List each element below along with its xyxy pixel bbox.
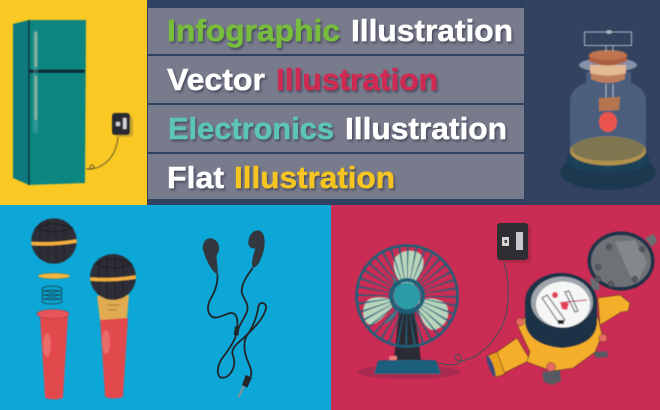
row: Electronics Illustration: Electronics — [168, 111, 334, 146]
row: Infographic Illustration — [148, 8, 524, 54]
bosses — [516, 318, 607, 372]
row: Infographic Illustration: Infographic — [167, 13, 340, 48]
row: Flat Illustration: Illustration — [234, 160, 395, 195]
row: Vector Illustration: Vector — [167, 62, 265, 97]
panel: blue background — [0, 205, 331, 410]
grille — [356, 246, 458, 346]
illustration: bell jar experiment — [560, 30, 656, 190]
title list — [148, 8, 524, 199]
illustration: refrigerator with socket — [13, 20, 133, 185]
panel: yellow fridge background — [0, 0, 148, 205]
row: Electronics Illustration: Illustration — [345, 111, 507, 146]
panel: navy title frame — [147, 0, 525, 205]
row: Electronics Illustration — [148, 105, 524, 152]
dial housing — [525, 302, 597, 348]
illustration: disassembled microphone — [30, 218, 78, 400]
dial details — [542, 291, 587, 324]
blades — [363, 251, 448, 330]
row: Vector Illustration: Illustration — [276, 62, 438, 97]
panel: crimson background — [331, 205, 660, 410]
row: Vector Illustration — [148, 56, 524, 103]
power cord — [439, 262, 508, 365]
retaining ring — [38, 273, 70, 279]
feet — [542, 351, 608, 385]
icon: wall socket — [497, 223, 531, 263]
mic head — [30, 218, 78, 264]
spring — [42, 286, 62, 304]
panel: navy jar background — [525, 0, 660, 205]
meter lid — [588, 232, 657, 290]
illustration: desk fan — [356, 246, 461, 379]
illustration: earphones — [203, 230, 266, 397]
row: Flat Illustration: Flat — [167, 160, 224, 195]
row: Flat Illustration — [148, 154, 524, 199]
illustration: water meter — [485, 232, 657, 385]
barrel — [40, 316, 68, 397]
row: Infographic Illustration: Illustration — [351, 13, 513, 48]
illustration: assembled microphone — [89, 254, 137, 398]
brass pipe body — [487, 295, 630, 377]
